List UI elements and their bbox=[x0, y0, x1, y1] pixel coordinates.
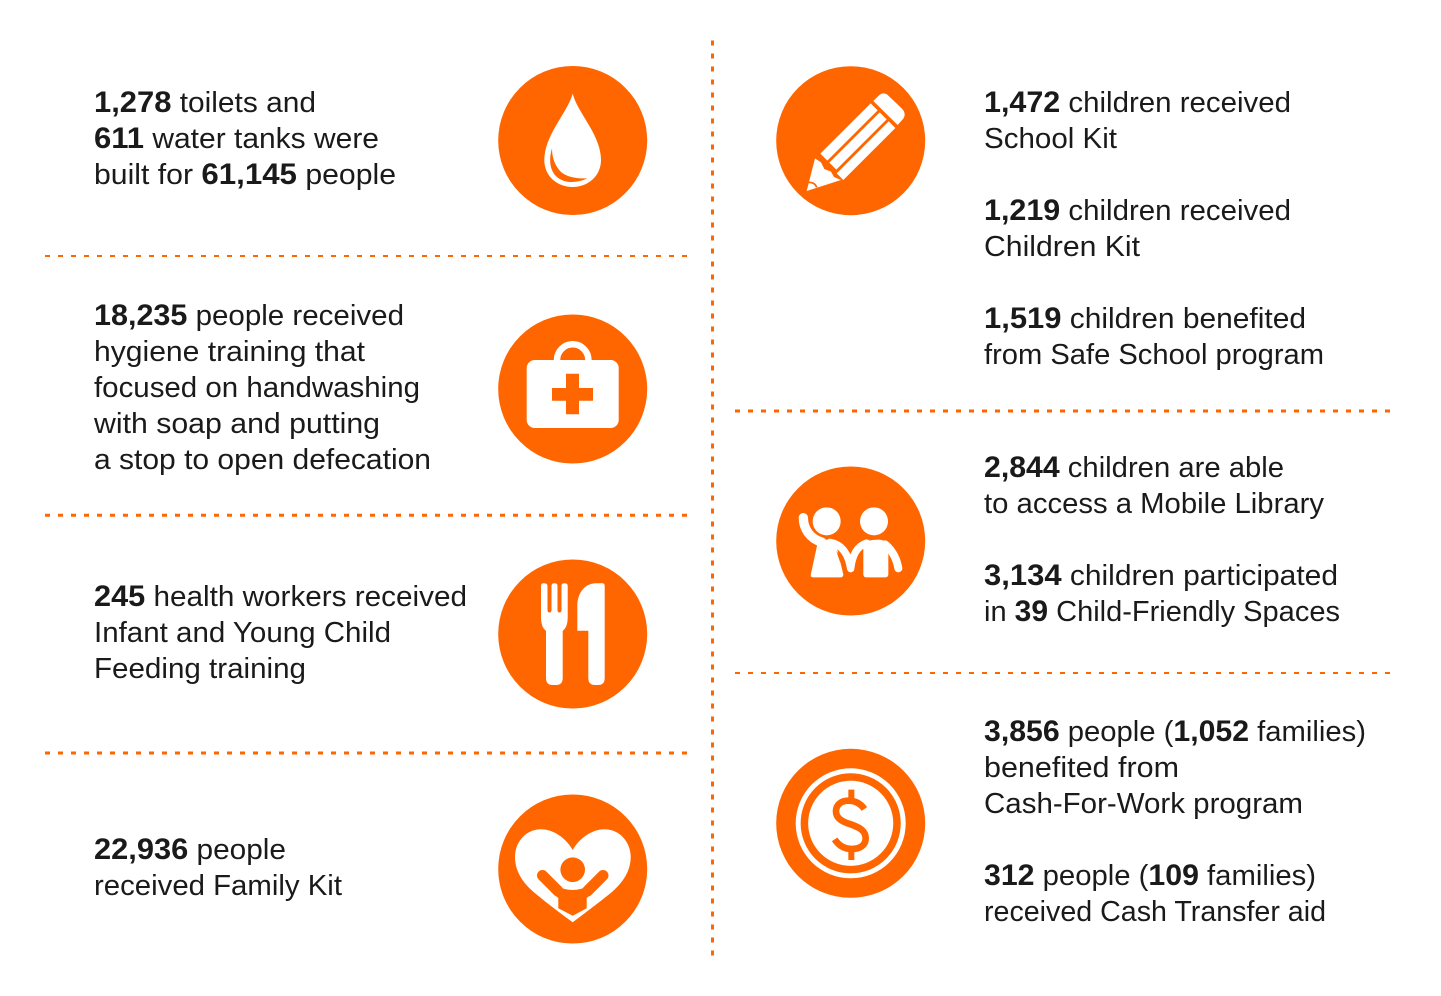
text block: health workers bbox=[94, 580, 467, 685]
panel: library and child-friendly spaces bbox=[776, 451, 1340, 628]
icon: heart with person bbox=[498, 794, 647, 944]
text block: health workers: Infant and Young Child bbox=[94, 617, 391, 649]
text block: school programmes: Children Kit bbox=[984, 231, 1140, 263]
text block: family kit: received Family Kit bbox=[94, 870, 342, 902]
text block: hygiene training bbox=[93, 299, 431, 476]
text block: library and child-friendly spaces: in 39 Child-Friendly Spaces bbox=[984, 595, 1340, 628]
icon: water drop bbox=[498, 66, 647, 215]
panel: cash programmes bbox=[776, 715, 1366, 928]
text block: school programmes: 1,472 children received bbox=[984, 86, 1291, 119]
text block: school programmes: from Safe School program bbox=[984, 339, 1324, 371]
text block: toilets and water tanks bbox=[94, 86, 396, 191]
text block: hygiene training: 18,235 people received bbox=[94, 299, 404, 332]
text block: toilets and water tanks: 1,278 toilets and bbox=[94, 86, 316, 119]
text block: school programmes: 1,219 children received bbox=[984, 194, 1291, 227]
panel: toilets and water tanks bbox=[94, 66, 647, 215]
text block: hygiene training: with soap and putting bbox=[93, 408, 380, 440]
panel: school programmes bbox=[776, 66, 1324, 371]
text block: hygiene training: hygiene training that bbox=[94, 336, 365, 368]
text block: school programmes: School Kit bbox=[984, 123, 1117, 155]
text block: cash programmes bbox=[984, 715, 1366, 928]
text block: cash programmes: benefited from bbox=[984, 752, 1179, 784]
panel: health workers bbox=[94, 560, 647, 708]
icon: two children bbox=[776, 466, 925, 616]
text block: school programmes: 1,519 children benefited bbox=[984, 302, 1306, 335]
panel: hygiene training bbox=[93, 299, 647, 476]
text block: toilets and water tanks: built for 61,145 people bbox=[94, 158, 396, 191]
text block: family kit: 22,936 people bbox=[94, 833, 286, 866]
text block: hygiene training: focused on handwashing bbox=[94, 372, 420, 404]
text block: cash programmes: 3,856 people (1,052 families) bbox=[984, 715, 1366, 748]
text block: health workers: 245 health workers received bbox=[94, 580, 467, 613]
text block: health workers: Feeding training bbox=[94, 653, 306, 685]
icon: dollar coin bbox=[776, 749, 925, 898]
icon: fork and knife bbox=[498, 560, 647, 708]
text block: family kit bbox=[94, 833, 342, 902]
text block: cash programmes: received Cash Transfer aid bbox=[984, 896, 1326, 928]
text block: toilets and water tanks: 611 water tanks were bbox=[94, 122, 379, 155]
text block: library and child-friendly spaces: 3,134 children participated bbox=[984, 559, 1338, 592]
text block: school programmes bbox=[984, 86, 1324, 371]
icon: first aid kit bbox=[498, 314, 647, 464]
text block: library and child-friendly spaces: 2,844 children are able bbox=[984, 451, 1284, 484]
panel: family kit bbox=[94, 794, 647, 944]
text block: library and child-friendly spaces: to access a Mobile Library bbox=[984, 488, 1324, 520]
text block: cash programmes: Cash-For-Work program bbox=[984, 788, 1303, 820]
text block: library and child-friendly spaces bbox=[984, 451, 1340, 628]
icon: pencil bbox=[776, 66, 925, 215]
text block: cash programmes: 312 people (109 families) bbox=[984, 859, 1316, 892]
text block: hygiene training: a stop to open defecation bbox=[94, 444, 431, 476]
